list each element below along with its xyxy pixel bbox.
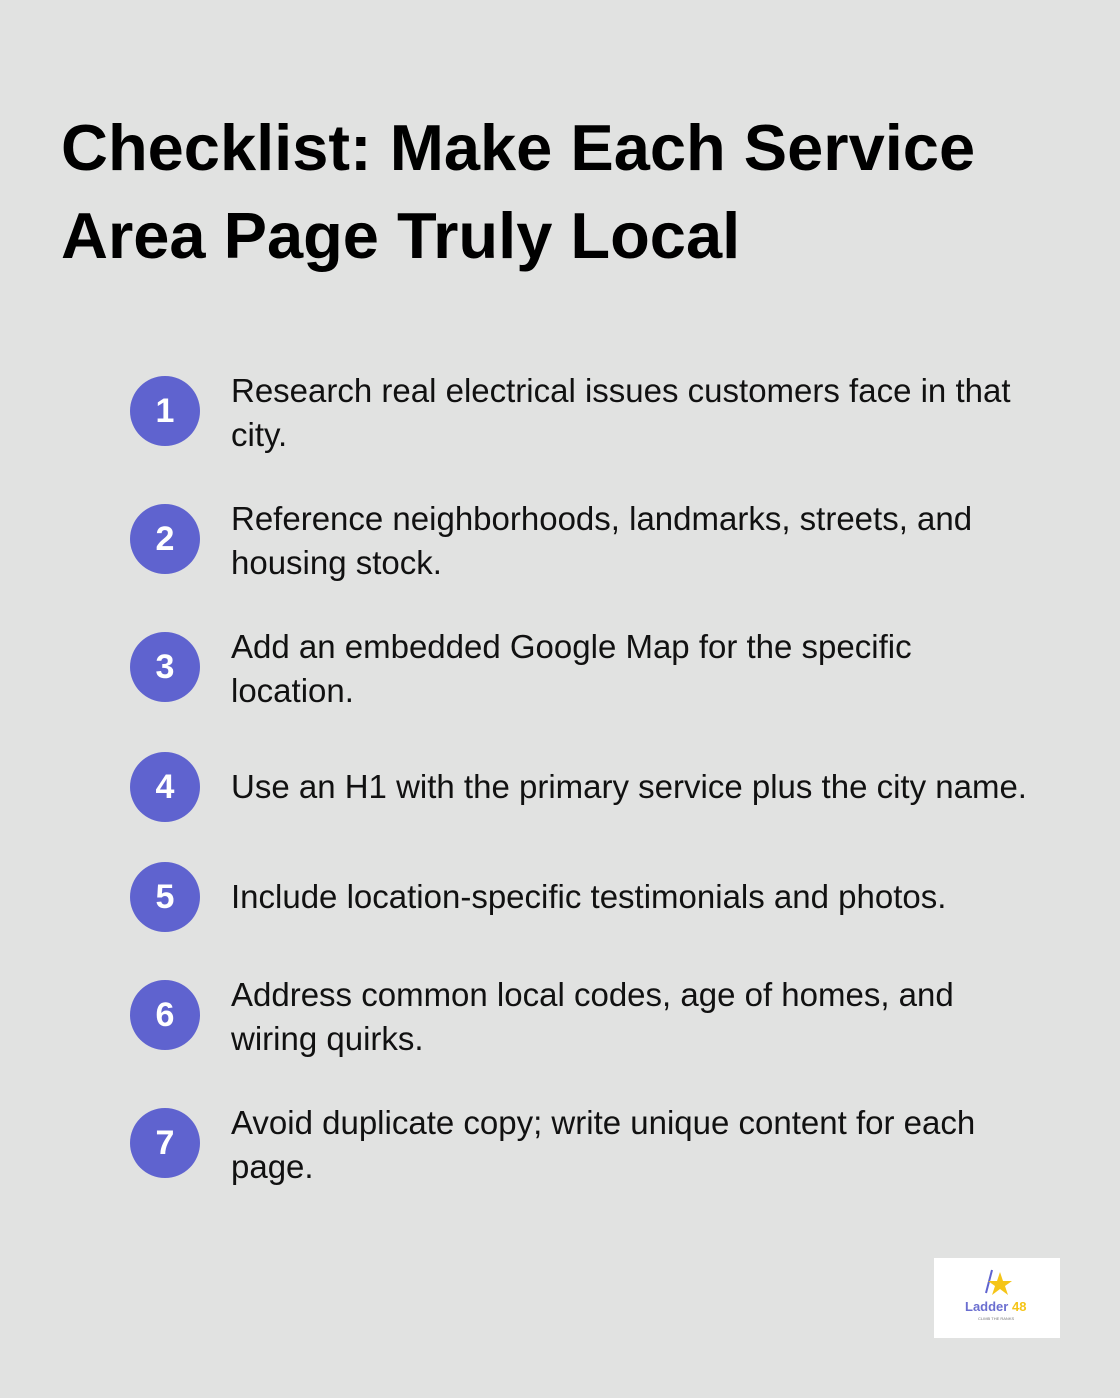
item 7: Avoid duplicate copy; write unique content for each bbox=[231, 1104, 975, 1141]
item 3 bbox=[130, 628, 912, 709]
logo: CLIMB THE RANKS bbox=[978, 1316, 1014, 1321]
title: Checklist: Make Each Service bbox=[61, 111, 975, 184]
item 7: page. bbox=[231, 1148, 314, 1185]
item 3: location. bbox=[231, 672, 354, 709]
item 1: city. bbox=[231, 416, 287, 453]
item 1: 1 bbox=[156, 392, 174, 430]
item 3: Add an embedded Google Map for the specific bbox=[231, 628, 912, 665]
logo: Ladder 48 bbox=[965, 1299, 1026, 1314]
item 6: wiring quirks. bbox=[231, 1020, 424, 1057]
item 2 bbox=[130, 500, 972, 581]
item 7 bbox=[130, 1104, 975, 1185]
item 1 bbox=[130, 372, 1010, 453]
item 4 bbox=[130, 752, 1027, 822]
item 2: Reference neighborhoods, landmarks, streets, and bbox=[231, 500, 972, 537]
item 2: housing stock. bbox=[231, 544, 442, 581]
item 2: 2 bbox=[156, 520, 174, 558]
item 5: Include location-specific testimonials and photos. bbox=[231, 878, 946, 915]
item 4: 4 bbox=[156, 768, 174, 806]
item 1: Research real electrical issues customers face in that bbox=[231, 372, 1010, 409]
logo bbox=[934, 1258, 1060, 1338]
item 5: 5 bbox=[156, 878, 174, 916]
item 6: Address common local codes, age of homes, and bbox=[231, 976, 954, 1013]
item 7: 7 bbox=[156, 1124, 174, 1162]
item 5 bbox=[130, 862, 946, 932]
item 6: 6 bbox=[156, 996, 174, 1034]
title: Area Page Truly Local bbox=[61, 199, 740, 272]
item 6 bbox=[130, 976, 954, 1057]
title bbox=[61, 111, 975, 272]
item 3: 3 bbox=[156, 648, 174, 686]
item 4: Use an H1 with the primary service plus the city name. bbox=[231, 768, 1027, 805]
